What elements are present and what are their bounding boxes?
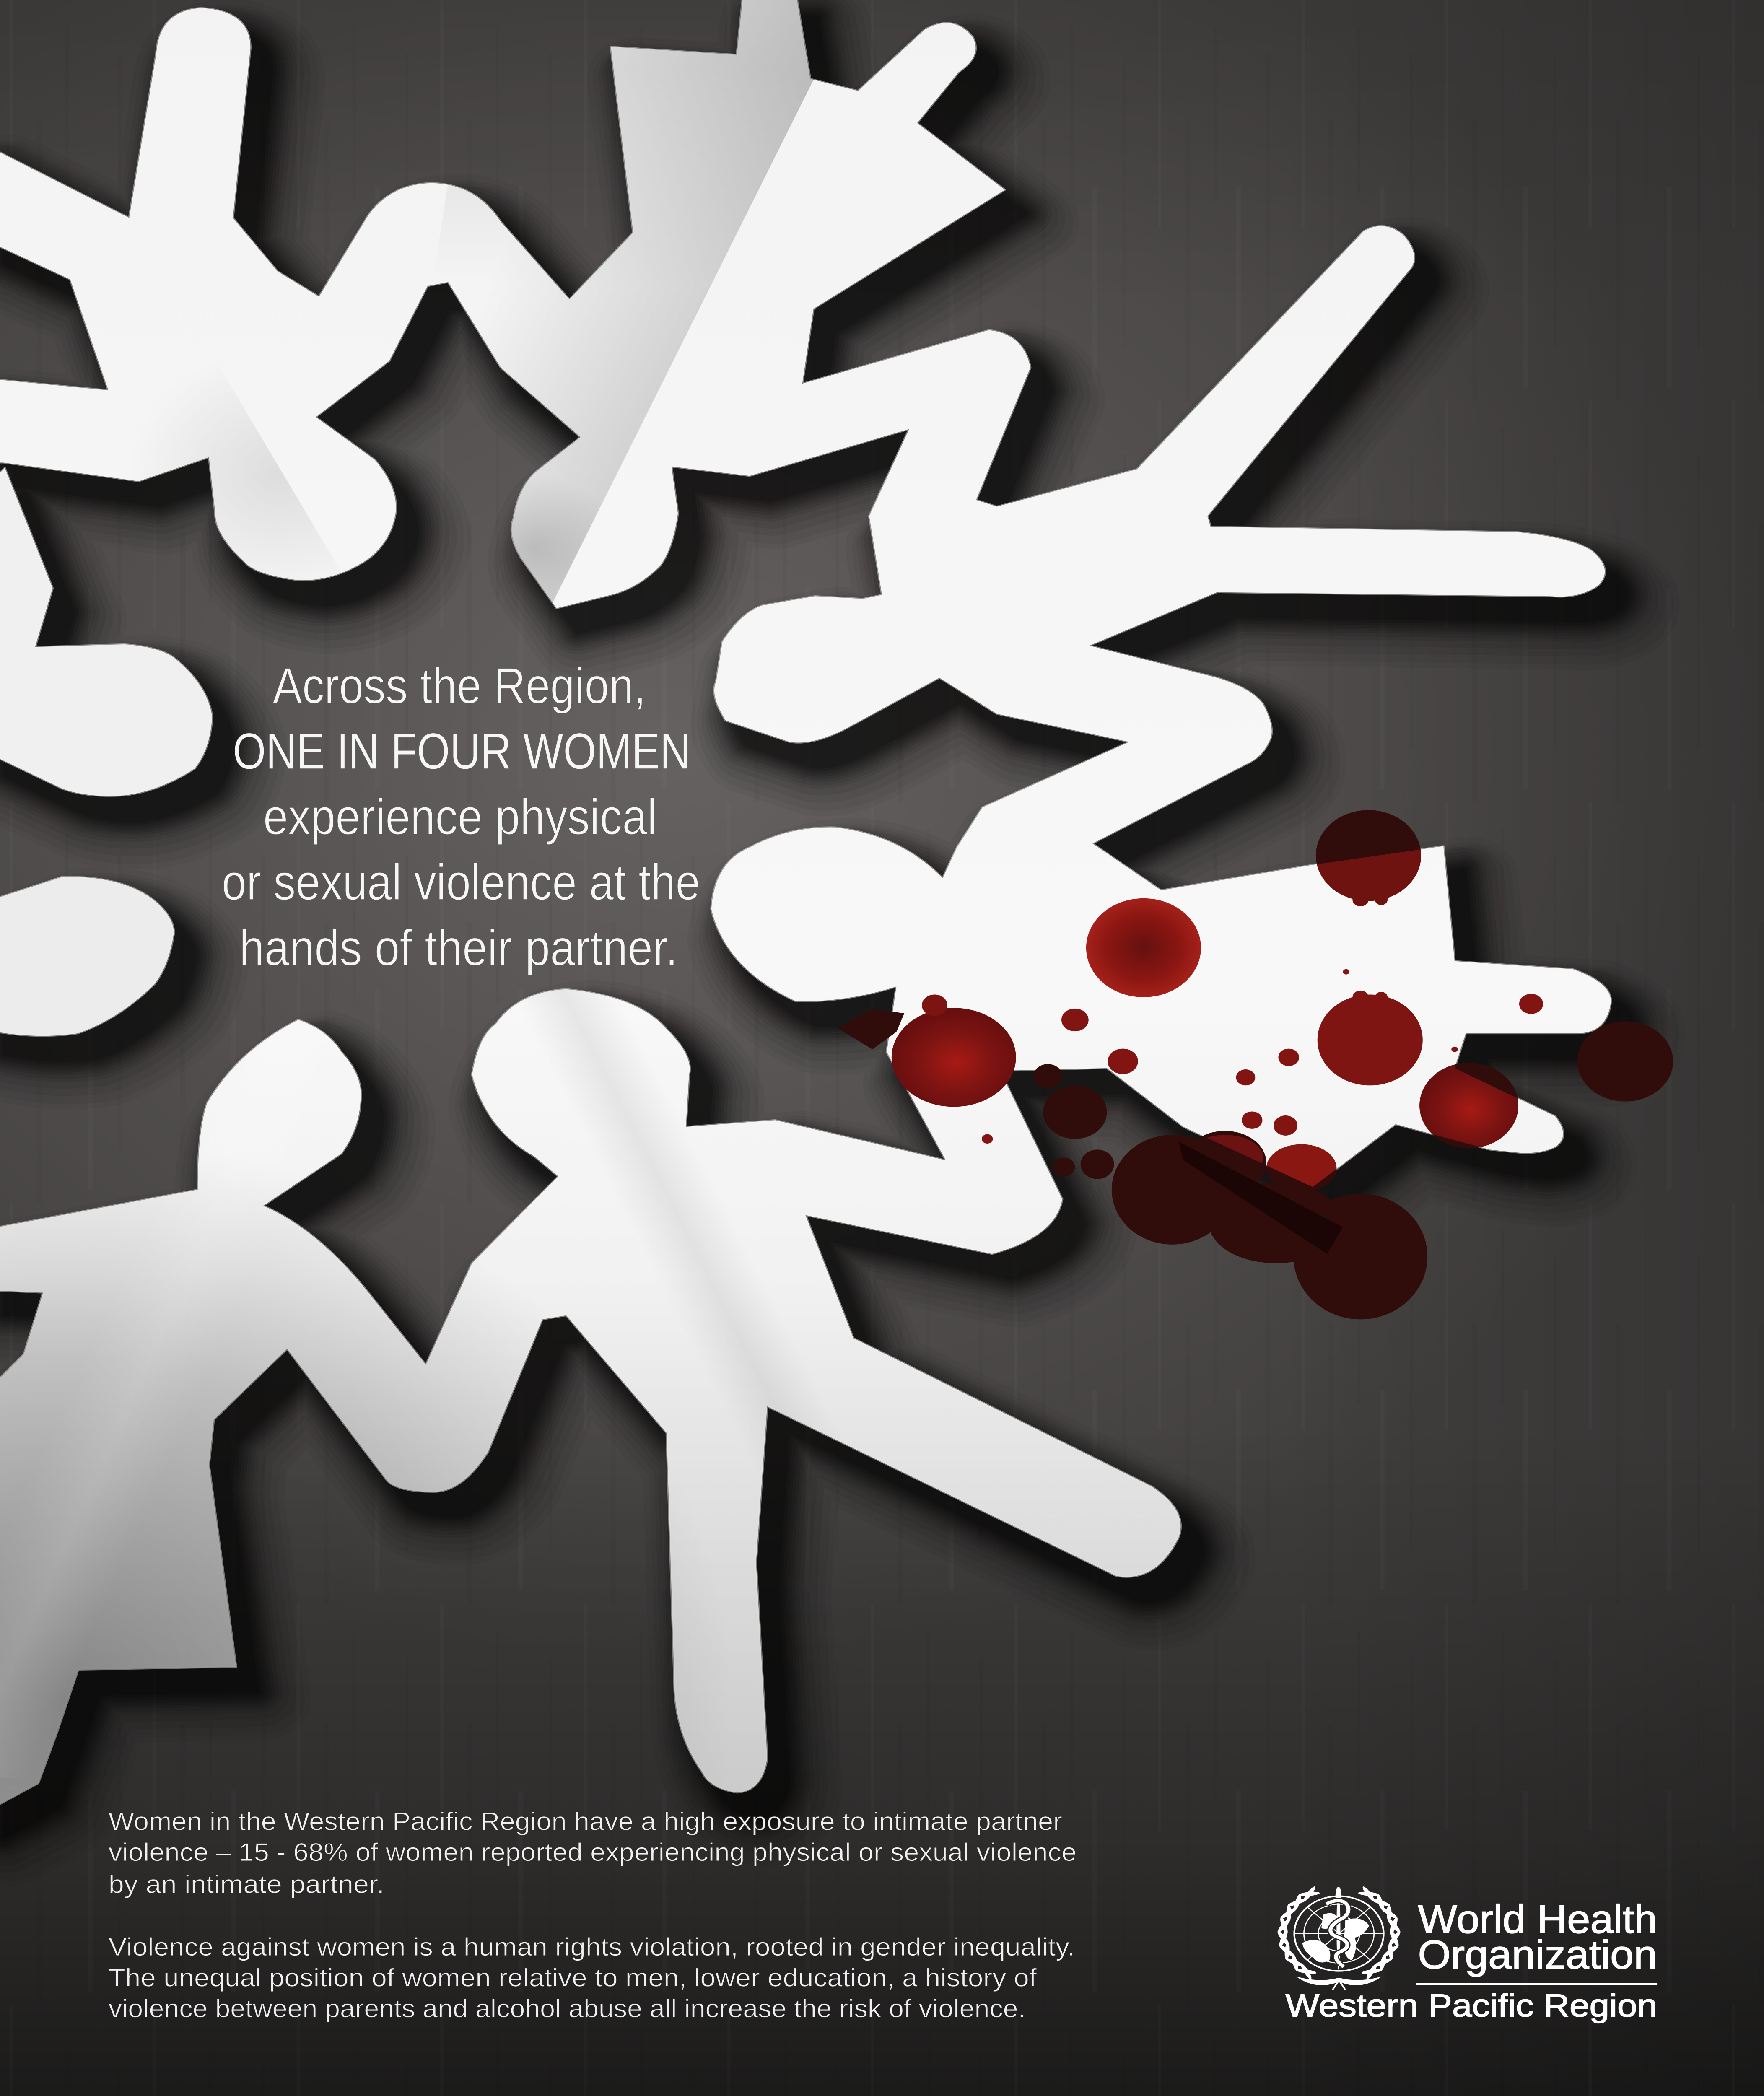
text block: human rights violation and risk factors xyxy=(109,1934,1075,2024)
headline: ONE IN FOUR WOMEN xyxy=(233,724,690,781)
headline: hands of their partner. xyxy=(239,921,678,977)
text block: human rights violation and risk factors: Violence against women is a human rights violation, rooted in gender inequality. xyxy=(109,1934,1075,1962)
headline: or sexual violence at the xyxy=(222,856,700,912)
text block: exposure to intimate partner violence: by an intimate partner. xyxy=(109,1871,384,1899)
text block: exposure to intimate partner violence: violence – 15 - 68% of women reported experiencing physical or sexual violence xyxy=(109,1839,1077,1868)
text block: exposure to intimate partner violence: Women in the Western Pacific Region have a high exposure to intimate partner xyxy=(109,1808,1063,1837)
blood: dark drops on the ground xyxy=(837,810,1673,1319)
headline: experience physical xyxy=(263,790,657,846)
logo wordmark: Organization xyxy=(1418,1934,1657,1978)
text block: human rights violation and risk factors: The unequal position of women relative to men, lower education, a history of xyxy=(109,1965,1038,1993)
logo wordmark xyxy=(1286,1898,1657,2024)
headline: Across the Region, xyxy=(273,659,646,715)
text block: exposure to intimate partner violence xyxy=(109,1808,1077,1899)
logo wordmark: Western Pacific Region xyxy=(1286,1988,1657,2024)
headline xyxy=(222,659,700,977)
logo wordmark: World Health xyxy=(1418,1898,1657,1942)
icon: WHO emblem xyxy=(1276,1886,1402,1990)
text block: human rights violation and risk factors: violence between parents and alcohol abuse all increase the risk of violence. xyxy=(109,1996,1025,2024)
blood: red drops on the paper xyxy=(1187,810,1518,1192)
WHO logo xyxy=(1276,1886,1657,2024)
blood drops xyxy=(837,810,1673,1319)
